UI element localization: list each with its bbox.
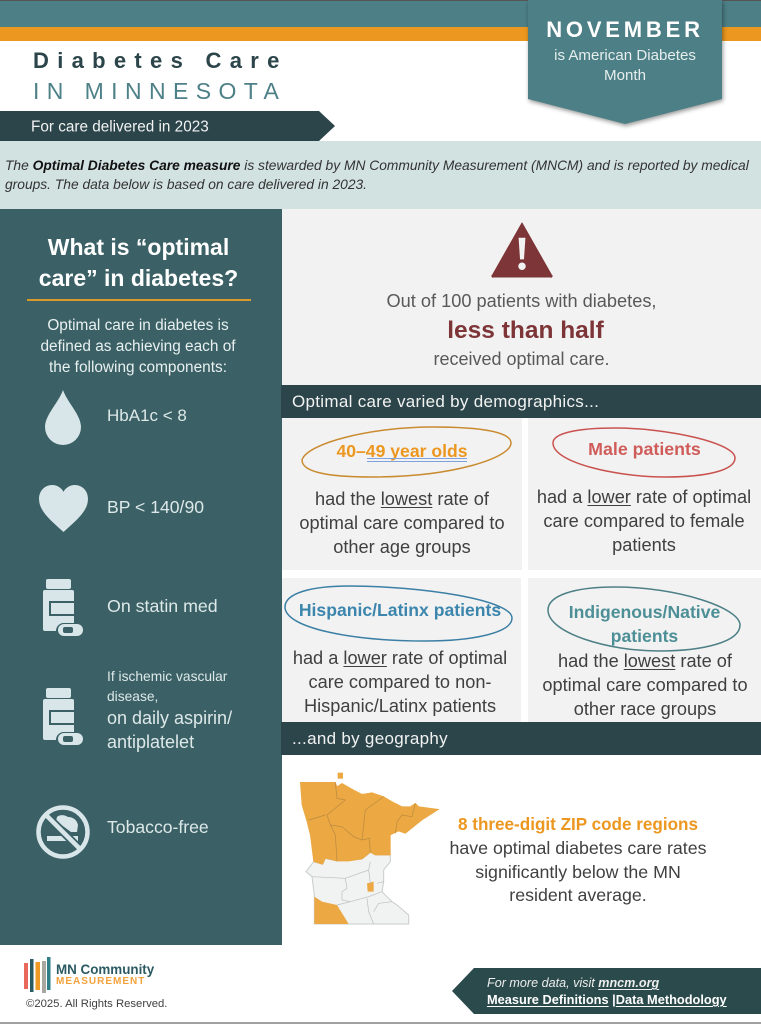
age text: other age groups — [333, 537, 471, 557]
panel: what is optimal care — [0, 209, 282, 945]
intro text band: The Optimal Diabetes Care measure is stewarded by MN Community Measurement (MNCM) and is reported by medical — [5, 158, 749, 173]
sex text: had a lower rate of optimal — [537, 487, 751, 507]
age group label: 40–49 year olds — [336, 441, 468, 461]
ellipse highlight — [284, 585, 513, 642]
geography text: have optimal diabetes care rates — [450, 838, 706, 858]
panel intro: defined as achieving each of — [40, 338, 236, 355]
ellipse highlight — [552, 427, 736, 478]
geography text: resident average. — [509, 885, 647, 905]
heading: demographics — [281, 385, 761, 418]
callout text — [387, 291, 656, 369]
logo: MN Community Measurement — [24, 957, 154, 993]
ribbon: November awareness month: Month — [604, 67, 646, 84]
callout text: less than half — [447, 317, 604, 344]
icon: warning triangle — [491, 222, 553, 278]
race label: Indigenous/Native — [569, 602, 720, 622]
logo: MN Community Measurement: MEASUREMENT — [56, 976, 145, 987]
panel: less than half callout — [282, 209, 761, 385]
banner: care delivered year: For care delivered in 2023 — [31, 118, 209, 136]
statin label: On statin med — [107, 596, 218, 616]
ethnicity text — [293, 648, 507, 716]
page bottom rule — [0, 1022, 761, 1024]
sex text: patients — [612, 535, 676, 555]
ethnicity text: care compared to non- — [308, 672, 492, 692]
race label: patients — [611, 626, 678, 646]
heading: demographics: Optimal care varied by demographics... — [292, 392, 599, 411]
intro text band — [0, 141, 761, 209]
footer banner: links — [452, 968, 761, 1014]
sex label: Male patients — [588, 439, 701, 459]
map: Minnesota ZIP regions — [300, 772, 440, 924]
ethnicity text: had a lower rate of optimal — [293, 648, 507, 668]
ethnicity label: Hispanic/Latinx patients — [299, 600, 501, 620]
race text — [542, 651, 748, 719]
aspirin label: antiplatelet — [107, 732, 194, 752]
logo: MN Community Measurement: MN Community — [56, 962, 154, 977]
heading: geography — [281, 722, 761, 755]
heading: geography: ...and by geography — [292, 729, 448, 748]
banner: care delivered year — [0, 111, 335, 141]
age text: optimal care compared to — [299, 513, 505, 533]
copyright: ©2025. All Rights Reserved. — [26, 998, 167, 1010]
race text: other race groups — [574, 699, 716, 719]
ribbon: November awareness month — [526, 0, 726, 128]
icon: heart — [39, 485, 88, 532]
race text: optimal care compared to — [542, 675, 748, 695]
icon: medication bottle — [43, 579, 83, 636]
panel intro: Optimal care in diabetes is — [47, 317, 229, 334]
card: sex — [528, 418, 761, 570]
geography text: significantly below the MN — [475, 862, 681, 882]
ellipse highlight — [301, 426, 512, 478]
age text: had the lowest rate of — [315, 489, 489, 509]
orange band — [0, 27, 761, 41]
icon: medication bottle — [43, 688, 83, 745]
aspirin label: disease, — [107, 688, 158, 704]
logo bars — [24, 957, 50, 993]
HbA1c label: HbA1c < 8 — [107, 406, 187, 425]
card: ethnicity — [282, 578, 521, 722]
icon: blood drop — [45, 390, 81, 445]
ribbon: November awareness month: NOVEMBER — [546, 17, 704, 42]
footer banner: links: For more data, visit mncm.org — [487, 976, 659, 990]
title — [33, 48, 288, 104]
heading rule — [27, 299, 251, 301]
icon: no smoking — [36, 805, 90, 859]
age text — [299, 489, 505, 557]
geography text — [450, 815, 706, 905]
geography text: 8 three-digit ZIP code regions — [458, 815, 698, 834]
sex text: care compared to female — [543, 511, 745, 531]
sex text — [537, 487, 751, 555]
spelling underline — [367, 458, 467, 462]
panel intro — [40, 317, 236, 376]
aspirin label: If ischemic vascular — [107, 669, 227, 684]
race text: had the lowest rate of — [558, 651, 732, 671]
panel heading: What is “optimal — [48, 234, 229, 260]
intro text band: groups. The data below is based on care delivered in 2023. — [5, 177, 367, 192]
callout text: Out of 100 patients with diabetes, — [387, 291, 656, 311]
panel heading: care” in diabetes? — [39, 265, 238, 291]
title: IN MINNESOTA — [33, 78, 286, 104]
tobacco label: Tobacco-free — [107, 817, 209, 837]
panel intro: the following components: — [49, 359, 227, 376]
card: race — [528, 578, 761, 722]
footer banner: links: Measure Definitions |Data Methodology — [487, 992, 727, 1007]
top teal band — [0, 0, 761, 27]
ellipse highlight — [547, 586, 741, 652]
BP label: BP < 140/90 — [107, 497, 204, 517]
race label — [569, 602, 720, 646]
panel heading — [39, 234, 238, 291]
aspirin label: on daily aspirin/ — [107, 708, 232, 728]
callout text: received optimal care. — [433, 349, 610, 369]
card: age — [282, 418, 522, 570]
ribbon: November awareness month: is American Diabetes — [554, 47, 696, 64]
title: Diabetes Care — [33, 48, 288, 73]
ethnicity text: Hispanic/Latinx patients — [304, 696, 496, 716]
aspirin label — [107, 669, 232, 752]
